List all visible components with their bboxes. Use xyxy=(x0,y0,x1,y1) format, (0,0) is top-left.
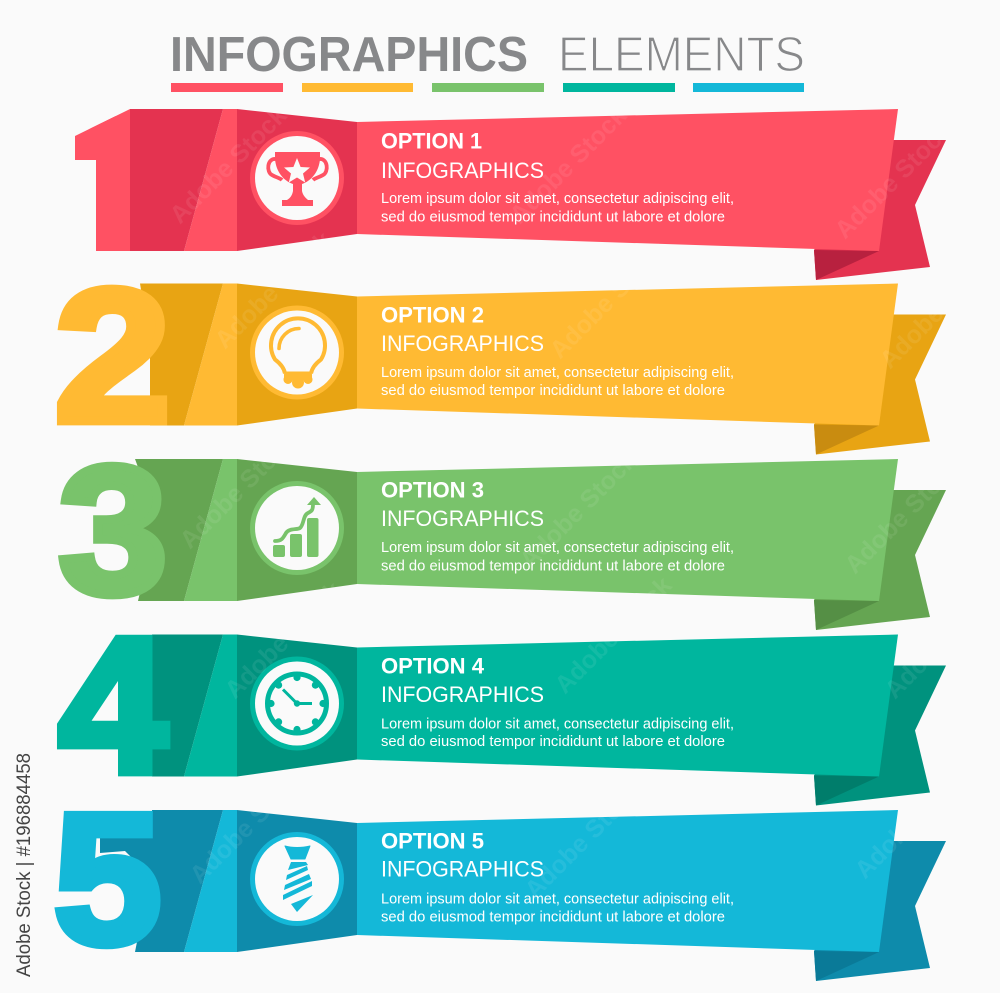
text: option 3: Lorem ipsum dolor sit amet, consectetur adipiscing elit, xyxy=(381,540,734,556)
panel: option 3 xyxy=(58,429,946,633)
stock id caption: Adobe Stock | #196884458 xyxy=(14,753,35,977)
watermark pattern: Adobe Stock xyxy=(839,451,967,579)
panel: option 4 xyxy=(58,598,946,814)
text: option 4: OPTION 4 xyxy=(381,654,485,678)
watermark pattern: Adobe Stock xyxy=(209,226,337,354)
watermark pattern: Adobe Stock xyxy=(849,756,977,884)
icon: clock xyxy=(250,656,344,750)
text: option 4: INFOGRAPHICS xyxy=(381,682,544,707)
text: option 5: sed do eiusmod tempor incididunt ut labore et dolore xyxy=(381,910,725,926)
title: ELEMENTS xyxy=(558,28,805,82)
text: option 3: sed do eiusmod tempor incididunt ut labore et dolore xyxy=(381,558,725,574)
title xyxy=(170,28,805,82)
watermark pattern: Adobe Stock xyxy=(504,101,632,229)
numeral 3: 3 xyxy=(58,429,168,633)
numeral 2: 2 xyxy=(54,251,171,462)
panel: option 1 xyxy=(75,109,946,280)
text: option 1: sed do eiusmod tempor incididunt ut labore et dolore xyxy=(381,210,725,226)
icon: necktie xyxy=(250,832,344,926)
numeral 4: 4 xyxy=(58,598,167,814)
icon: light bulb xyxy=(250,306,344,400)
text: option 2: Lorem ipsum dolor sit amet, consectetur adipiscing elit, xyxy=(381,365,734,381)
text: option 4: sed do eiusmod tempor incididunt ut labore et dolore xyxy=(381,734,725,750)
watermark pattern: Adobe Stock xyxy=(164,101,292,229)
watermark pattern: Adobe Stock xyxy=(174,426,302,554)
panel: option 5 xyxy=(54,776,946,983)
watermark pattern: Adobe Stock xyxy=(544,236,672,364)
watermark pattern: Adobe Stock xyxy=(519,776,647,904)
watermark pattern: Adobe Stock xyxy=(874,246,1000,374)
text: option 5 xyxy=(381,828,734,926)
text: option 1: Lorem ipsum dolor sit amet, consectetur adipiscing elit, xyxy=(381,191,734,207)
text: option 5: Lorem ipsum dolor sit amet, consectetur adipiscing elit, xyxy=(381,892,734,908)
text: option 2 xyxy=(381,302,734,399)
text: option 1: INFOGRAPHICS xyxy=(381,158,544,183)
text: option 5: OPTION 5 xyxy=(381,828,484,854)
text: option 3: OPTION 3 xyxy=(381,478,484,502)
text: option 2: INFOGRAPHICS xyxy=(381,331,544,356)
icon: growth chart xyxy=(250,481,344,575)
watermark pattern: Adobe Stock xyxy=(219,576,347,704)
text: option 3 xyxy=(381,478,734,574)
icon: trophy xyxy=(250,131,344,225)
watermark pattern: Adobe Stock xyxy=(514,446,642,574)
text: option 1: OPTION 1 xyxy=(381,128,482,154)
watermark pattern xyxy=(164,101,1000,904)
watermark pattern: Adobe Stock xyxy=(549,571,677,699)
text: option 1 xyxy=(381,128,734,226)
text: option 3: INFOGRAPHICS xyxy=(381,506,544,531)
panel: option 2 xyxy=(54,251,946,462)
numeral 5: 5 xyxy=(54,776,162,983)
watermark pattern: Adobe Stock xyxy=(829,116,957,244)
text: option 4 xyxy=(381,654,734,750)
numeral 1: 1 xyxy=(62,74,171,293)
colour key bars xyxy=(171,83,804,92)
text: option 2: sed do eiusmod tempor incididunt ut labore et dolore xyxy=(381,383,725,399)
text: option 5: INFOGRAPHICS xyxy=(381,856,544,882)
watermark pattern: Adobe Stock xyxy=(184,761,312,889)
text: option 2: OPTION 2 xyxy=(381,302,484,328)
text: option 4: Lorem ipsum dolor sit amet, consectetur adipiscing elit, xyxy=(381,716,734,732)
title: INFOGRAPHICS xyxy=(170,28,528,82)
